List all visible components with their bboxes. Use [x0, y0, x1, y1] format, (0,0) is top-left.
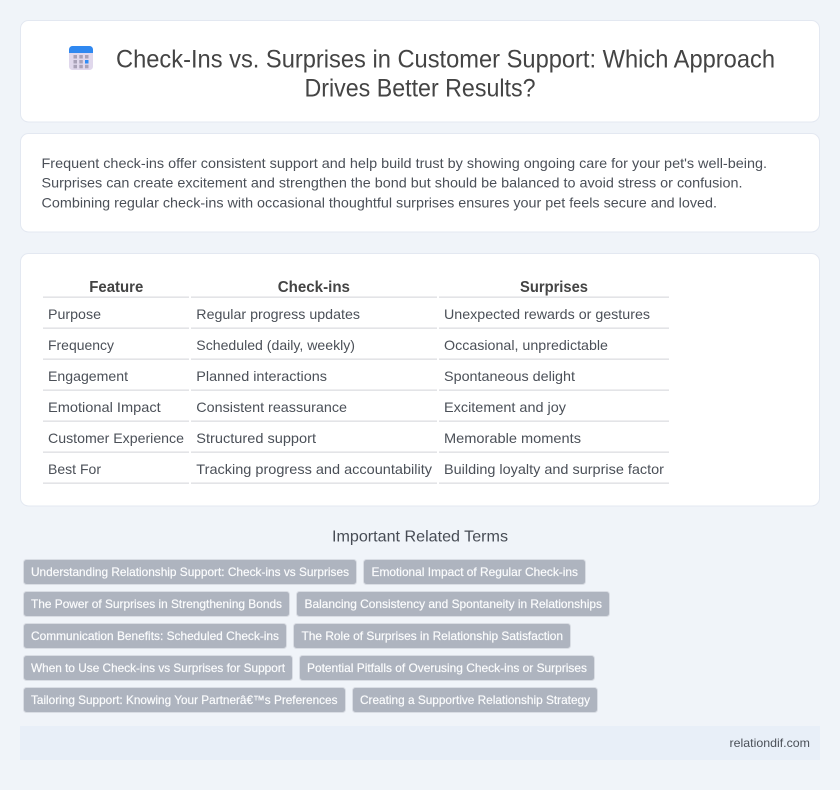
row: purpose: Unexpected rewards or gestures [444, 306, 650, 322]
row: best for: Tracking progress and accountability [196, 461, 432, 477]
table header row: Surprises [520, 279, 588, 296]
row: customer experience: Customer Experience [48, 430, 184, 446]
related term chips: When to Use Check-ins vs Surprises for Support [31, 661, 286, 675]
title [116, 46, 775, 102]
related term chips: Creating a Supportive Relationship Strategy [360, 693, 590, 707]
footer [20, 726, 820, 760]
row: emotional impact: Emotional Impact [48, 399, 161, 415]
row: engagement: Planned interactions [196, 368, 327, 384]
panel: header [20, 20, 820, 122]
row: best for: Building loyalty and surprise factor [444, 461, 664, 477]
row: customer experience: Structured support [196, 430, 316, 446]
panel: intro text [20, 134, 820, 232]
row: purpose: Regular progress updates [196, 306, 360, 322]
table header row [89, 279, 588, 296]
row: engagement: Spontaneous delight [444, 368, 575, 384]
icon: calendar [69, 46, 93, 70]
related term chips: The Role of Surprises in Relationship Satisfaction [302, 629, 563, 643]
panel: comparison table [20, 254, 820, 506]
related term chips [24, 560, 610, 712]
row: frequency: Scheduled (daily, weekly) [196, 337, 355, 353]
row: frequency [48, 337, 608, 353]
row: purpose: Purpose [48, 306, 101, 322]
related term chips: Communication Benefits: Scheduled Check-ins [31, 629, 279, 643]
row: frequency: Occasional, unpredictable [444, 337, 608, 353]
row: best for [48, 461, 664, 477]
table header row: Check-ins [278, 279, 350, 296]
table header row: Feature [89, 279, 144, 296]
row: customer experience [48, 430, 581, 446]
related term chips: Potential Pitfalls of Overusing Check-ins or Surprises [307, 661, 587, 675]
row: emotional impact: Excitement and joy [444, 399, 566, 415]
intro paragraph: Surprises can create excitement and strengthen the bond but should be balanced to avoid stress or confusion. [42, 175, 742, 191]
row: purpose [48, 306, 650, 322]
row: engagement [48, 368, 575, 384]
related term chips: Understanding Relationship Support: Check-ins vs Surprises [31, 565, 349, 579]
row: emotional impact [48, 399, 566, 415]
row: customer experience: Memorable moments [444, 430, 581, 446]
related term chips: Emotional Impact of Regular Check-ins [372, 565, 578, 579]
intro paragraph: Frequent check-ins offer consistent support and help build trust by showing ongoing care for your pet's well-being. [42, 155, 767, 171]
intro paragraph [42, 155, 767, 210]
heading: important related terms: Important Related Terms [332, 528, 508, 546]
row: engagement: Engagement [48, 368, 128, 384]
related term chips: Tailoring Support: Knowing Your Partnerâ€™s Preferences [31, 693, 338, 707]
row: best for: Best For [48, 461, 101, 477]
related term chips: The Power of Surprises in Strengthening Bonds [31, 597, 282, 611]
row: frequency: Frequency [48, 337, 114, 353]
row: emotional impact: Consistent reassurance [196, 399, 347, 415]
related term chips: Balancing Consistency and Spontaneity in Relationships [304, 597, 602, 611]
intro paragraph: Combining regular check-ins with occasional thoughtful surprises ensures your pet feels secure and loved. [42, 194, 717, 210]
footer: relationdif.com [730, 736, 810, 750]
title: Check-Ins vs. Surprises in Customer Support: Which Approach [116, 46, 775, 74]
title: Drives Better Results? [304, 74, 536, 102]
